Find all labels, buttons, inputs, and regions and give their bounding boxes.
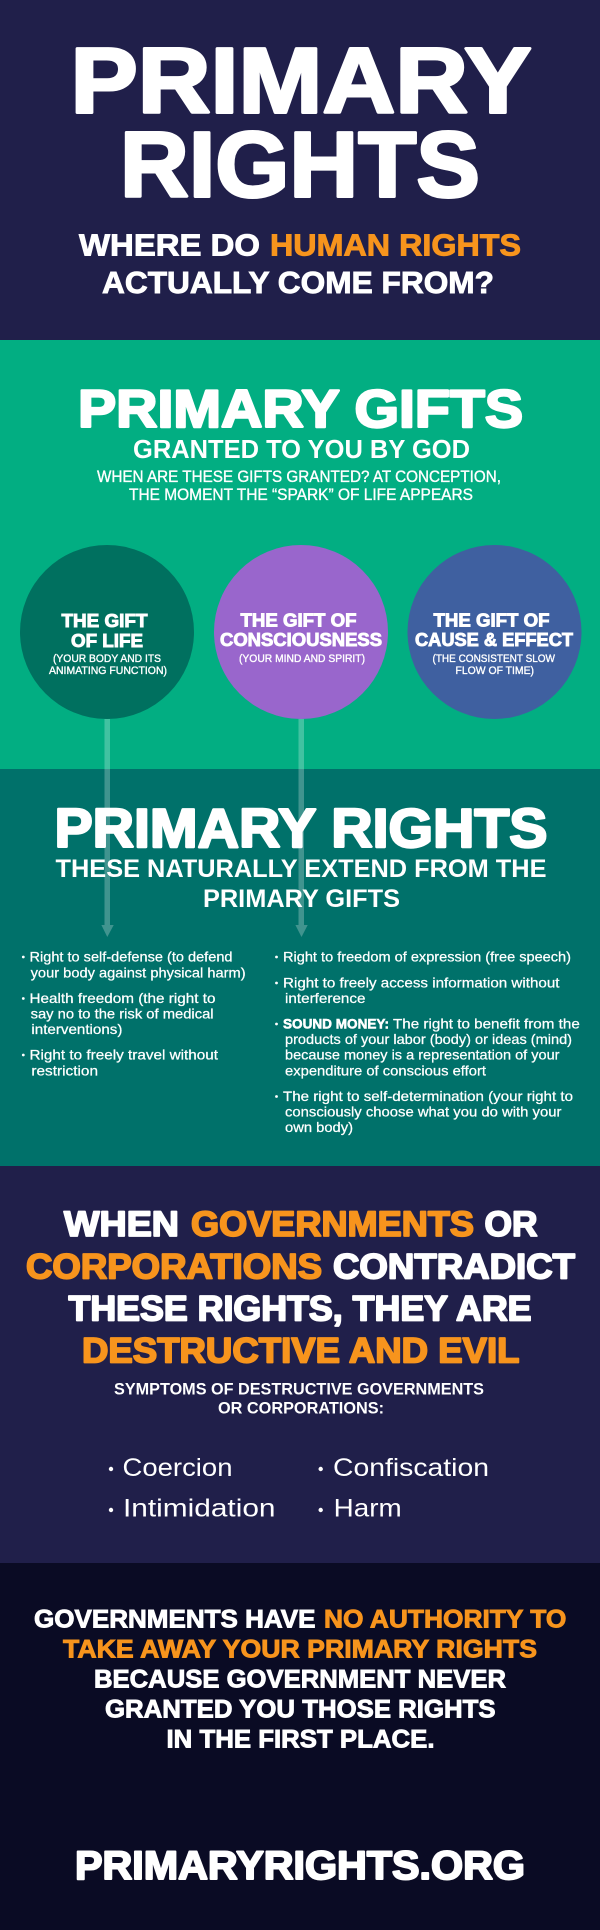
subheading: naturally extend: PRIMARY GIFTS <box>203 885 400 913</box>
panel: primary rights background <box>0 769 600 1166</box>
heading: contradict these rights: DESTRUCTIVE AND EVIL <box>82 1332 520 1370</box>
arrow: consciousness to rights <box>295 719 308 937</box>
statement: no authority: BECAUSE GOVERNMENT NEVER <box>94 1666 506 1694</box>
list: left column rights: Right to self-defense (to defend <box>30 949 232 965</box>
panel: hero <box>0 0 600 340</box>
circle: the gift of cause and effect: (THE CONSISTENT SLOW <box>432 653 556 665</box>
circle: the gift of life <box>20 545 194 719</box>
arrow: life to rights <box>101 719 114 937</box>
subheading: symptoms <box>114 1380 484 1418</box>
list: right column rights: The right to self-determination (your right to <box>283 1088 573 1104</box>
list: right column rights: Right to freedom of expression (free speech) <box>283 949 571 965</box>
title: PRIMARY <box>70 28 532 132</box>
panel: primary gifts <box>0 340 600 769</box>
circle: the gift of consciousness: (YOUR MIND AND SPIRIT) <box>239 653 365 665</box>
subtitle: ACTUALLY COME FROM? <box>102 265 494 300</box>
list: symptoms: Confiscation <box>333 1454 489 1482</box>
subheading: granted by god: GRANTED TO YOU BY GOD <box>133 434 470 464</box>
circle: the gift of life: OF LIFE <box>71 631 143 651</box>
heading: contradict these rights: CONTRADICT <box>333 1248 575 1286</box>
subheading: naturally extend: THESE NATURALLY EXTEND FROM THE <box>56 855 546 883</box>
list: right column rights <box>275 949 580 1135</box>
statement: no authority: NO AUTHORITY TO <box>324 1606 566 1634</box>
heading: contradict these rights: OR <box>484 1205 538 1244</box>
subtitle: HUMAN RIGHTS <box>270 228 521 262</box>
list: left column rights: your body against physical harm) <box>31 964 246 980</box>
website url: PRIMARYRIGHTS.ORG <box>75 1844 525 1888</box>
list: right column rights: own body) <box>285 1119 353 1135</box>
circle: the gift of consciousness: THE GIFT OF <box>240 610 356 630</box>
list: right column rights: The right to benefit from the <box>393 1016 580 1032</box>
panel: destructive governments <box>0 1166 600 1563</box>
panel: no authority <box>0 1563 600 1930</box>
list: symptoms: Intimidation <box>123 1495 276 1523</box>
panel: primary rights content <box>22 797 580 1135</box>
circle: the gift of consciousness <box>214 545 388 719</box>
list: symptoms <box>109 1454 489 1523</box>
list: right column rights: interference <box>285 990 366 1006</box>
circle: the gift of cause and effect: CAUSE & EFFECT <box>415 630 573 650</box>
statement: no authority: IN THE FIRST PLACE. <box>166 1726 434 1754</box>
list: left column rights <box>22 949 246 1078</box>
list: right column rights: Right to freely access information without <box>283 974 560 990</box>
title: RIGHTS <box>120 112 480 216</box>
heading: contradict these rights: WHEN <box>64 1205 179 1244</box>
subheading: symptoms: SYMPTOMS OF DESTRUCTIVE GOVERNMENTS <box>114 1380 484 1398</box>
list: left column rights: say no to the risk of medical <box>31 1006 214 1022</box>
list: right column rights: consciously choose what you do with your <box>285 1104 562 1120</box>
subheading: symptoms: OR CORPORATIONS: <box>218 1400 384 1418</box>
statement: no authority <box>34 1606 566 1754</box>
list: left column rights: Right to freely travel without <box>30 1047 218 1063</box>
subheading: naturally extend <box>56 855 546 913</box>
list: right column rights: SOUND MONEY: <box>283 1016 389 1032</box>
circle: the gift of life: ANIMATING FUNCTION) <box>49 665 167 677</box>
list: right column rights: products of your labor (body) or ideas (mind) <box>285 1031 572 1047</box>
circle: the gift of cause and effect: THE GIFT OF <box>434 610 550 630</box>
heading: contradict these rights <box>26 1205 575 1370</box>
list: right column rights: expenditure of conscious effort <box>285 1062 486 1078</box>
circle: the gift of cause and effect: FLOW OF TIME) <box>456 665 534 677</box>
list: left column rights: Health freedom (the right to <box>30 990 216 1006</box>
heading: primary gifts: PRIMARY GIFTS <box>78 380 523 439</box>
text: when gifts are granted: WHEN ARE THESE GIFTS GRANTED? AT CONCEPTION, <box>97 468 501 486</box>
statement: no authority: TAKE AWAY YOUR PRIMARY RIGHTS <box>63 1636 537 1664</box>
heading: contradict these rights: GOVERNMENTS <box>191 1205 474 1244</box>
heading: primary rights: PRIMARY RIGHTS <box>54 797 548 859</box>
heading: contradict these rights: CORPORATIONS <box>26 1248 322 1286</box>
list: symptoms: Harm <box>334 1495 402 1523</box>
circle: the gift of life: (YOUR BODY AND ITS <box>53 653 161 665</box>
title <box>70 28 532 216</box>
subtitle <box>79 228 521 300</box>
list: symptoms: Coercion <box>122 1454 232 1482</box>
circle: the gift of life: THE GIFT <box>62 611 148 631</box>
circle: the gift of consciousness: CONSCIOUSNESS <box>220 630 382 650</box>
statement: no authority: GRANTED YOU THOSE RIGHTS <box>105 1696 496 1724</box>
list: left column rights: restriction <box>31 1062 98 1078</box>
subtitle: WHERE DO <box>79 228 260 262</box>
list: left column rights: interventions) <box>31 1021 122 1037</box>
heading: contradict these rights: THESE RIGHTS, THEY ARE <box>68 1290 532 1328</box>
text: when gifts are granted <box>97 468 501 504</box>
statement: no authority: GOVERNMENTS HAVE <box>34 1606 316 1634</box>
circle: the gift of cause and effect <box>408 545 582 719</box>
text: when gifts are granted: THE MOMENT THE “SPARK” OF LIFE APPEARS <box>129 486 473 504</box>
list: right column rights: because money is a representation of your <box>285 1047 560 1063</box>
